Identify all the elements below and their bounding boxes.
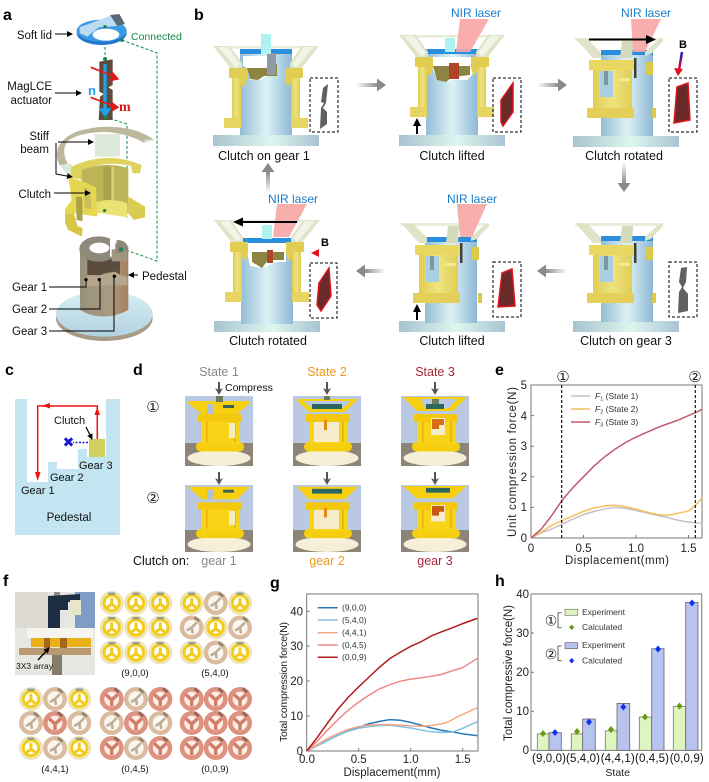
panel label d: d <box>133 362 143 379</box>
panel b: actuation cycle <box>213 6 697 348</box>
legend: (State 3) <box>603 417 638 427</box>
state markers: ② <box>688 368 702 386</box>
curve F3 <box>531 409 702 538</box>
axis tick labels: 0.5 <box>576 543 592 555</box>
panel h: bar chart <box>503 589 704 779</box>
axes <box>307 594 478 751</box>
axis tick labels: (0,4,5) <box>635 753 669 765</box>
axis tick labels: 20 <box>290 676 303 688</box>
bottom labels: gear 3 <box>417 554 453 568</box>
legend <box>318 602 367 662</box>
labels for panel a: beam <box>20 144 49 156</box>
headings: State 1 <box>199 365 239 379</box>
row markers: ① <box>146 398 160 416</box>
array (0,0,9): (0,0,9) <box>201 764 229 775</box>
y axis title: Total compressive force(N) <box>503 605 515 741</box>
legend: Calculated <box>582 656 622 666</box>
labels for panel a: MagLCE <box>7 81 52 93</box>
axis tick labels: 1.0 <box>403 754 419 766</box>
axis tick labels: 40 <box>516 589 529 601</box>
legend: Experiment <box>582 640 626 650</box>
curve (0,0,9) <box>307 618 477 751</box>
bottom labels: gear 1 <box>201 554 237 568</box>
curve (5,4,0) <box>307 722 477 751</box>
axis tick labels: 3 <box>521 441 527 453</box>
axis tick labels: 1.5 <box>455 754 471 766</box>
axis tick labels: 0.0 <box>299 754 315 766</box>
array (5,4,0) <box>180 591 252 679</box>
bottom labels <box>133 554 453 568</box>
axis tick labels: 10 <box>516 706 529 718</box>
inset: actuator <box>310 78 338 132</box>
panel f: array configurations <box>15 591 252 775</box>
legend: Calculated <box>582 622 622 632</box>
x axis title: State <box>605 767 630 779</box>
labels: Pedestal <box>47 512 91 524</box>
legend <box>571 391 638 428</box>
calculated diamonds blue <box>552 600 695 736</box>
labels for panel a: m <box>119 100 131 115</box>
unit: clutch rotated (lower) <box>214 204 337 332</box>
unit: clutch rotated <box>573 19 697 147</box>
stiff beam <box>57 127 154 179</box>
axis tick labels: 10 <box>290 711 303 723</box>
array (4,4,1): (4,4,1) <box>41 764 69 775</box>
axis tick labels: 40 <box>290 606 303 618</box>
clutch block <box>89 439 105 457</box>
axes <box>531 594 702 750</box>
legend: 1 <box>600 396 603 402</box>
MagLCE actuator <box>91 57 119 120</box>
legend: F <box>595 391 601 401</box>
axis tick labels: 4 <box>521 411 528 423</box>
axes <box>531 385 702 538</box>
axis tick labels: 1.5 <box>680 543 696 555</box>
labels: Gear 1 <box>21 485 55 497</box>
compress arrows <box>215 382 439 485</box>
panel g: total compression force chart <box>278 594 478 779</box>
x axis title: Displacement(mm) <box>344 767 441 779</box>
pedestal <box>56 236 153 341</box>
photo: state 2 row 2 <box>293 485 361 552</box>
legend: (State 1) <box>603 391 638 401</box>
motion arrowheads <box>35 403 100 481</box>
photo: state 1 row 1 <box>185 396 253 466</box>
y axis title: Total compression force(N) <box>278 622 290 742</box>
panel c: gear track diagram <box>15 399 120 535</box>
unit: clutch on gear 3 <box>573 223 697 332</box>
state markers <box>556 368 702 386</box>
row markers: ② <box>146 489 160 507</box>
state markers: ① <box>556 368 570 386</box>
labels for panel a <box>7 30 187 338</box>
axis tick labels: (0,0,9) <box>670 753 704 765</box>
labels for panel a: Clutch <box>18 189 51 201</box>
array arrow <box>38 648 49 660</box>
axis tick labels: (9,0,0) <box>532 753 566 765</box>
panel label h: h <box>495 573 505 590</box>
axis tick labels: 0 <box>297 746 303 758</box>
NIR laser label: NIR laser <box>268 192 318 206</box>
caption: Clutch lifted <box>419 149 485 163</box>
legend: (0,4,5) <box>342 640 367 650</box>
headings <box>199 365 455 394</box>
bottom labels: gear 2 <box>309 554 345 568</box>
axis tick labels: 30 <box>516 628 529 640</box>
blocked cross: ✖ <box>63 434 74 450</box>
curve (9,0,0) <box>307 720 477 751</box>
panel label g: g <box>270 575 280 592</box>
labels: Gear 2 <box>50 472 84 484</box>
axis tick labels: 0 <box>523 745 529 757</box>
panel label c: c <box>5 362 14 379</box>
legend: (4,4,1) <box>342 628 367 638</box>
NIR laser label: NIR laser <box>451 6 501 20</box>
NIR laser label: NIR laser <box>621 6 671 20</box>
caption: Clutch on gear 1 <box>218 149 310 163</box>
legend: 3 <box>600 422 603 428</box>
axis tick labels: 20 <box>516 667 529 679</box>
curve F1 <box>531 507 702 538</box>
clutch pointer <box>86 427 92 439</box>
state dashed lines <box>562 385 695 538</box>
labels for panel a: Gear 1 <box>12 282 47 294</box>
array (0,4,5): (0,4,5) <box>121 764 149 775</box>
axis tick labels <box>521 380 696 555</box>
labels for panel a: Pedestal <box>142 271 187 283</box>
arrow <box>537 78 567 92</box>
labels for panel a: Gear 2 <box>12 304 47 316</box>
headings: Compress <box>225 382 273 394</box>
unit: clutch lifted (lower) <box>399 204 521 332</box>
labels: Clutch <box>54 415 85 427</box>
curve F2 <box>531 498 702 538</box>
axis tick labels: 30 <box>290 641 303 653</box>
calculated diamonds green <box>540 702 682 737</box>
legend: (9,0,0) <box>342 602 367 612</box>
caption: Clutch lifted <box>419 334 485 348</box>
panel e: unit compression force chart <box>507 368 702 567</box>
legend: 2 <box>600 410 603 416</box>
pedestal profile <box>15 399 120 535</box>
axis tick labels: 1 <box>521 502 527 514</box>
labels for panel a: Soft lid <box>17 30 52 42</box>
photo: state 2 row 1 <box>293 396 361 466</box>
x axis title: Displacement(mm) <box>565 555 669 567</box>
caption: Clutch rotated <box>229 334 307 348</box>
headings: State 2 <box>307 365 347 379</box>
unit: clutch lifted <box>399 19 521 146</box>
arrow <box>537 264 567 278</box>
legend: ① <box>545 614 557 630</box>
axis tick labels: 0 <box>521 533 527 545</box>
panel d: photos of states <box>133 365 469 568</box>
photo: state 3 row 1 <box>401 396 469 466</box>
array (0,4,5) <box>100 687 172 775</box>
labels <box>21 415 113 524</box>
array (9,0,0) <box>100 591 172 679</box>
bottom labels: Clutch on: <box>133 554 189 568</box>
panel a: exploded view <box>7 14 187 341</box>
axis tick labels: 0.5 <box>351 754 367 766</box>
labels for panel a: Stiff <box>29 131 50 143</box>
legend: F <box>595 417 601 427</box>
bars: experiment at state 2 <box>549 602 698 750</box>
axis tick labels <box>290 606 471 766</box>
curve (4,4,1) <box>307 708 477 751</box>
unit: clutch on gear 1 <box>213 34 338 146</box>
labels for panel a: Connected <box>131 31 182 43</box>
legend: ② <box>545 647 557 663</box>
panel label b: b <box>194 7 204 24</box>
array (4,4,1) <box>19 687 91 775</box>
axis tick labels: 1.0 <box>628 543 644 555</box>
axis tick labels: (5,4,0) <box>566 753 600 765</box>
caption: Clutch on gear 3 <box>580 334 672 348</box>
soft lid <box>77 14 127 45</box>
labels: Gear 3 <box>79 460 113 472</box>
array (9,0,0): (9,0,0) <box>121 668 149 679</box>
array label: 3X3 array <box>16 661 54 671</box>
legend: (0,0,9) <box>342 652 367 662</box>
axis tick labels: (4,4,1) <box>601 753 635 765</box>
photo: state 1 row 2 <box>185 485 253 552</box>
clutch <box>65 158 145 237</box>
photo of 3x3 array <box>15 592 95 675</box>
magnetic field label: B <box>321 237 329 249</box>
legend: (5,4,0) <box>342 615 367 625</box>
legend: (State 2) <box>603 404 638 414</box>
array (0,0,9) <box>180 687 252 775</box>
caption: Clutch rotated <box>585 149 663 163</box>
axis tick labels: 5 <box>521 380 527 392</box>
arrow <box>262 163 274 193</box>
panel label f: f <box>3 573 9 590</box>
bars: experiment at state 1 <box>537 706 686 750</box>
green connection lines <box>105 27 157 261</box>
legend: Experiment <box>582 607 626 617</box>
headings: State 3 <box>415 365 455 379</box>
blocked direction <box>73 442 88 444</box>
legend <box>545 607 626 666</box>
array (5,4,0): (5,4,0) <box>201 668 229 679</box>
arrow <box>618 162 630 192</box>
row markers <box>146 398 160 507</box>
labels for panel a: actuator <box>10 95 52 107</box>
labels for panel a: Gear 3 <box>12 326 47 338</box>
curve (0,4,5) <box>307 659 477 751</box>
photo: state 3 row 2 <box>401 485 469 552</box>
arrow <box>356 78 386 92</box>
legend: F <box>595 404 601 414</box>
axis tick labels <box>516 589 704 765</box>
axis tick labels: 2 <box>521 472 527 484</box>
NIR laser label: NIR laser <box>447 192 497 206</box>
y axis title: Unit compression force(N) <box>507 387 519 537</box>
axis tick labels: 0 <box>528 543 534 555</box>
labels for panel a: n <box>88 83 96 98</box>
panel label a: a <box>3 7 12 24</box>
arrow <box>356 264 386 278</box>
callout lines <box>49 34 138 331</box>
panel label e: e <box>495 362 504 379</box>
magnetic field label: B <box>679 39 687 51</box>
motion path <box>38 406 97 478</box>
